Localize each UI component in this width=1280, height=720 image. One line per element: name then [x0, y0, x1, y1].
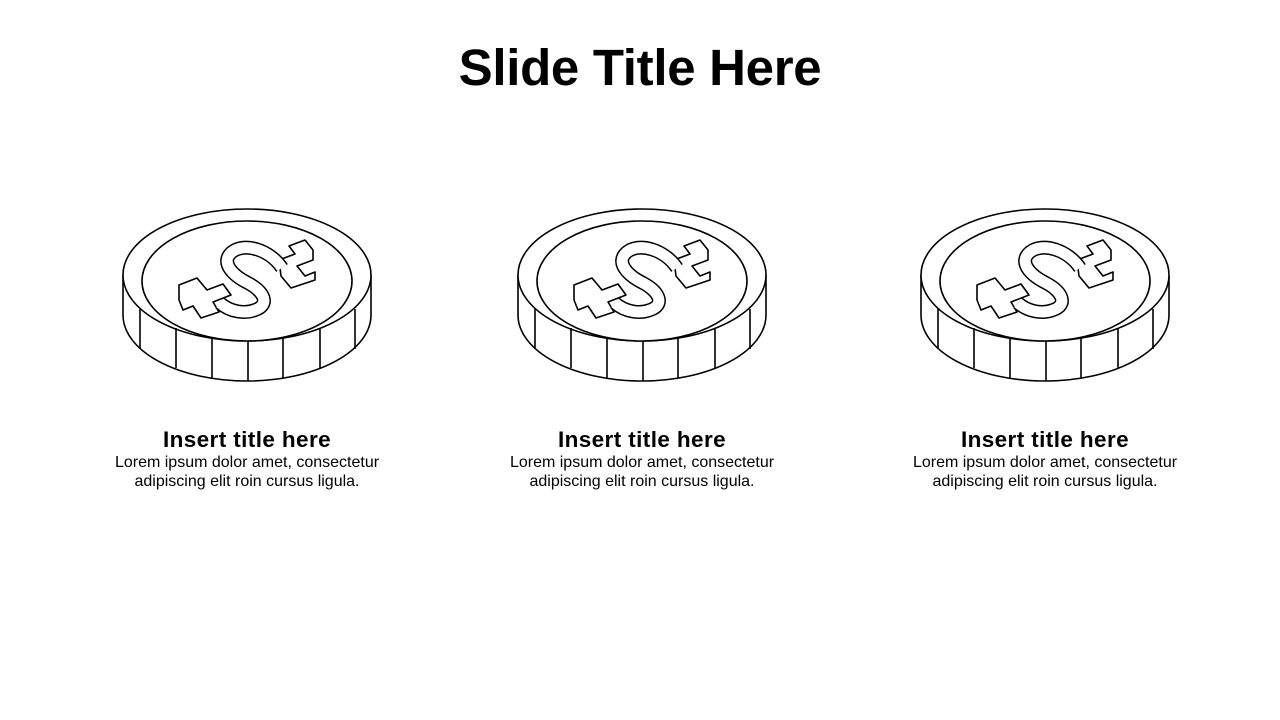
text block 2: Lorem ipsum dolor amet, consectetur — [510, 454, 774, 471]
text block 3: adipiscing elit roin cursus ligula. — [932, 473, 1158, 490]
icon: coin 2 — [518, 209, 766, 381]
text block 1: Lorem ipsum dolor amet, consectetur — [115, 454, 379, 471]
text block 3: Lorem ipsum dolor amet, consectetur — [913, 454, 1177, 471]
icon: coin 3 — [921, 209, 1169, 381]
text block 2: Insert title here — [558, 427, 726, 452]
text block 2 — [510, 427, 774, 490]
text block 3: Insert title here — [961, 427, 1129, 452]
text block 1: adipiscing elit roin cursus ligula. — [134, 473, 360, 490]
text block 1: Insert title here — [163, 427, 331, 452]
text block 3 — [913, 427, 1177, 490]
text block 2: adipiscing elit roin cursus ligula. — [530, 473, 754, 490]
text block 1 — [115, 427, 379, 490]
icon: coin 1 — [123, 209, 371, 381]
title: Slide Title Here — [459, 39, 821, 96]
